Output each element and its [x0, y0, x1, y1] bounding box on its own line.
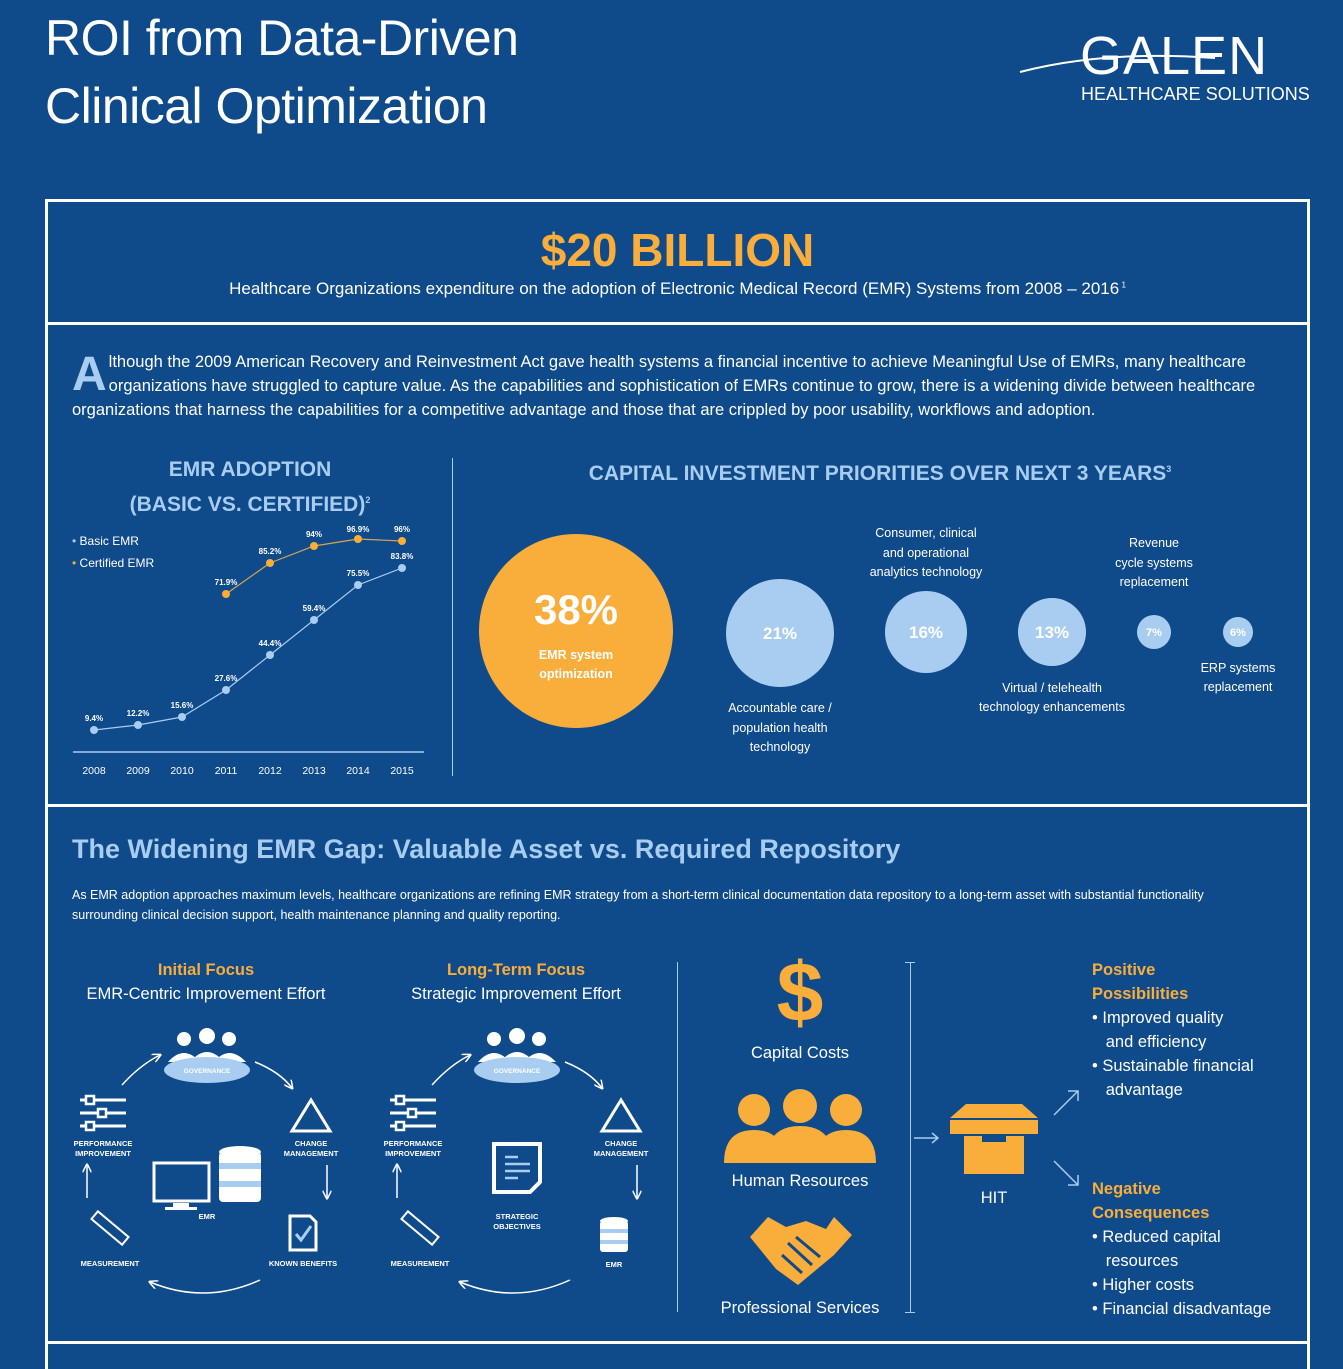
right cycle — [384, 1028, 649, 1293]
headline stat: $20 BILLION — [541, 224, 814, 276]
bubble chart: optimization — [539, 667, 613, 681]
line chart: 2009 — [126, 765, 150, 777]
title: Clinical Optimization — [45, 78, 487, 134]
line chart: • Basic EMR — [72, 534, 139, 548]
line chart: 83.8% — [391, 552, 413, 561]
line chart: 12.2% — [127, 709, 149, 718]
cycle diagrams — [74, 1028, 648, 1294]
line chart: 9.4% — [85, 714, 103, 723]
bubble chart: analytics technology — [870, 565, 983, 579]
icon: dollar: $ — [777, 945, 823, 1039]
bubble chart: 13% — [1035, 623, 1069, 642]
cycle diagrams: EMR — [199, 1212, 216, 1221]
inputs column: Human Resources — [732, 1172, 868, 1190]
line chart: 27.6% — [215, 674, 237, 683]
line chart: 2014 — [346, 765, 370, 777]
chart heading — [130, 458, 370, 516]
capital investment heading: CAPITAL INVESTMENT PRIORITIES OVER NEXT 3 YEARS3 — [589, 462, 1171, 485]
bubble chart: ERP systems — [1201, 661, 1275, 675]
arrow to HIT — [914, 1132, 939, 1144]
positive possibilities: Possibilities — [1092, 985, 1188, 1003]
positive possibilities: and efficiency — [1106, 1033, 1206, 1051]
left center: EMR — [154, 1163, 209, 1201]
negative consequences: • Financial disadvantage — [1092, 1300, 1271, 1318]
cycle diagrams: GOVERNANCE — [184, 1068, 231, 1075]
line chart: 59.4% — [303, 604, 325, 613]
title: ROI from Data-Driven — [45, 10, 518, 66]
negative consequences: Negative — [1092, 1180, 1161, 1198]
bubble chart: 6% — [1230, 627, 1246, 639]
logo: HEALTHCARE SOLUTIONS — [1081, 84, 1310, 104]
bubble chart: 16% — [909, 623, 943, 642]
long-term focus heading — [411, 961, 621, 1003]
bubble chart: 7% — [1146, 627, 1162, 639]
cycle diagrams: KNOWN BENEFITS — [269, 1259, 337, 1268]
negative consequences — [1092, 1180, 1271, 1318]
intro text: A — [72, 348, 107, 401]
line chart: 71.9% — [215, 578, 237, 587]
bubble chart: population health — [732, 721, 828, 735]
negative consequences: resources — [1106, 1252, 1178, 1270]
icon: HIT box: HIT — [981, 1189, 1007, 1207]
headline stat — [229, 224, 1126, 298]
bubble chart: replacement — [1204, 680, 1273, 694]
cycle diagrams: MEASUREMENT — [81, 1259, 140, 1268]
bubble chart: cycle systems — [1115, 556, 1193, 570]
cycle diagrams: PERFORMANCE — [74, 1139, 132, 1148]
inputs column: Capital Costs — [751, 1044, 849, 1062]
initial focus heading — [86, 961, 326, 1003]
bubble chart: Consumer, clinical — [875, 526, 977, 540]
line chart: • Certified EMR — [72, 556, 155, 570]
positive possibilities — [1092, 961, 1254, 1099]
line chart: 75.5% — [347, 569, 369, 578]
cycle diagrams: IMPROVEMENT — [75, 1149, 131, 1158]
positive possibilities: Positive — [1092, 961, 1155, 979]
bubble chart: Virtual / telehealth — [1002, 681, 1102, 695]
cycle diagrams: OBJECTIVES — [493, 1222, 541, 1231]
bubble chart: 21% — [763, 624, 797, 643]
negative consequences: • Reduced capital — [1092, 1228, 1221, 1246]
line chart: 96% — [394, 525, 410, 534]
line chart: 15.6% — [171, 701, 193, 710]
section text: As EMR adoption approaches maximum levels, healthcare organizations are refining EMR strategy from a short-term clinical documentation data repository to a long-term asset with substantial functionality surrounding clinical decision support, health maintenance planning and quality reporting. — [72, 888, 1204, 922]
line chart: 44.4% — [259, 639, 281, 648]
long-term focus heading: Long-Term Focus — [447, 961, 585, 979]
cycle diagrams: MANAGEMENT — [284, 1149, 339, 1158]
positive possibilities: advantage — [1106, 1081, 1183, 1099]
bubble chart: 38% — [534, 586, 618, 633]
cycle diagrams: STRATEGIC — [496, 1212, 539, 1221]
positive possibilities: • Improved quality — [1092, 1009, 1223, 1027]
line chart: 2010 — [170, 765, 194, 777]
line chart: 94% — [306, 530, 322, 539]
line chart: 2008 — [82, 765, 106, 777]
line chart — [72, 525, 424, 777]
line chart: 85.2% — [259, 547, 281, 556]
title — [45, 10, 518, 134]
line chart: 2012 — [258, 765, 282, 777]
chart heading: EMR ADOPTION — [169, 458, 331, 481]
icon: handshake — [750, 1217, 852, 1285]
negative consequences: Consequences — [1092, 1204, 1209, 1222]
line chart: 2015 — [390, 765, 414, 777]
line chart: 2011 — [215, 765, 237, 777]
cycle diagrams: EMR — [606, 1260, 623, 1269]
inputs column: Professional Services — [721, 1299, 879, 1317]
bubble chart: Accountable care / — [728, 701, 832, 715]
line chart: 2013 — [302, 765, 326, 777]
bubble chart — [479, 526, 1275, 754]
bubble chart: Revenue — [1129, 536, 1179, 550]
bubble chart: replacement — [1120, 575, 1189, 589]
initial focus heading: EMR-Centric Improvement Effort — [86, 985, 326, 1003]
icon: people — [724, 1089, 876, 1163]
bubble chart: technology — [750, 740, 811, 754]
inputs column — [721, 945, 879, 1317]
cycle diagrams: CHANGE — [295, 1139, 327, 1148]
initial focus heading: Initial Focus — [158, 961, 254, 979]
line chart: 96.9% — [347, 525, 369, 534]
chart heading: (BASIC VS. CERTIFIED)2 — [130, 493, 370, 516]
bubble chart: technology enhancements — [979, 700, 1125, 714]
headline stat: Healthcare Organizations expenditure on the adoption of Electronic Medical Record (EMR) Systems from 2008 – 2016 1 — [229, 279, 1126, 298]
logo: GALEN — [1080, 26, 1268, 86]
long-term focus heading: Strategic Improvement Effort — [411, 985, 621, 1003]
bubble chart: EMR system — [539, 648, 613, 662]
logo — [1020, 26, 1310, 104]
icon: HIT box — [950, 1104, 1038, 1207]
arrows up/down — [1054, 1090, 1079, 1186]
positive possibilities: • Sustainable financial — [1092, 1057, 1254, 1075]
section heading: The Widening EMR Gap: Valuable Asset vs. Required Repository — [72, 834, 900, 864]
negative consequences: • Higher costs — [1092, 1276, 1194, 1294]
intro text: lthough the 2009 American Recovery and Reinvestment Act gave health systems a financial incentive to achieve Meaningful Use of EMRs, many healthcare organizations have struggled to capture value. As the capabilities and sophistication of EMRs continue to grow, there is a widening divide between healthcare organizations that harness the capabilities for a competitive advantage and those that are crippled by poor usability, workflows and adoption. — [72, 353, 1255, 419]
bubble chart: and operational — [883, 546, 969, 560]
